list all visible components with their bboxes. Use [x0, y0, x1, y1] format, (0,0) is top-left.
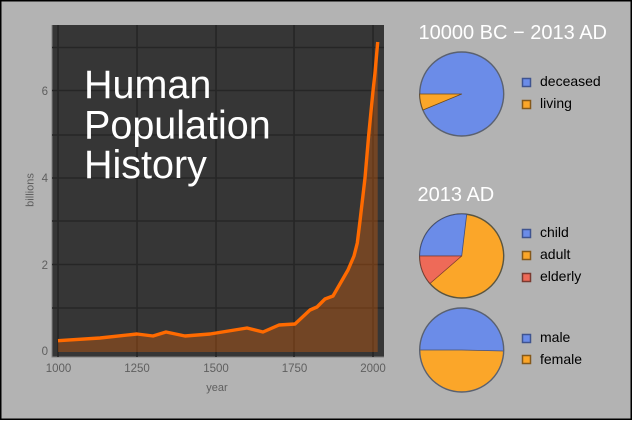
legend: age: adult: [540, 246, 570, 262]
pie chart: deceased vs living: [420, 52, 504, 136]
title: Human: [84, 63, 211, 107]
legend: age: [522, 224, 581, 284]
y axis labels: 0: [42, 346, 48, 358]
legend: sex: [522, 329, 582, 367]
x axis labels: [46, 363, 386, 375]
legend: age: elderly: [540, 268, 581, 284]
chart area fill: [58, 42, 378, 352]
y axis labels: 4: [42, 173, 49, 185]
legend: deceased vs living: deceased: [540, 73, 601, 89]
x axis labels: 1000: [46, 363, 71, 375]
y axis title: billions: [24, 173, 36, 207]
legend: deceased vs living: living: [540, 95, 572, 111]
x axis labels: 2000: [360, 363, 386, 375]
line chart: human population: [24, 25, 386, 394]
legend: sex: male: [540, 329, 571, 345]
title: Population: [84, 104, 271, 148]
title: History: [84, 143, 207, 187]
y axis labels: 6: [42, 86, 48, 98]
x axis title: year: [206, 382, 228, 394]
heading: all time: 10000 BC − 2013 AD: [418, 22, 607, 44]
pie chart: age: [420, 214, 504, 298]
chart line: [58, 42, 378, 341]
y axis labels: 2: [42, 260, 48, 272]
legend: age: child: [540, 224, 569, 240]
x axis labels: 1250: [124, 363, 150, 375]
y axis labels: [42, 86, 49, 358]
pie chart: sex: [420, 308, 504, 392]
x axis labels: 1750: [282, 363, 307, 375]
legend: sex: female: [540, 351, 582, 367]
legend: deceased vs living: [522, 73, 601, 111]
heading: 2013: 2013 AD: [418, 184, 494, 206]
x axis labels: 1500: [203, 363, 229, 375]
